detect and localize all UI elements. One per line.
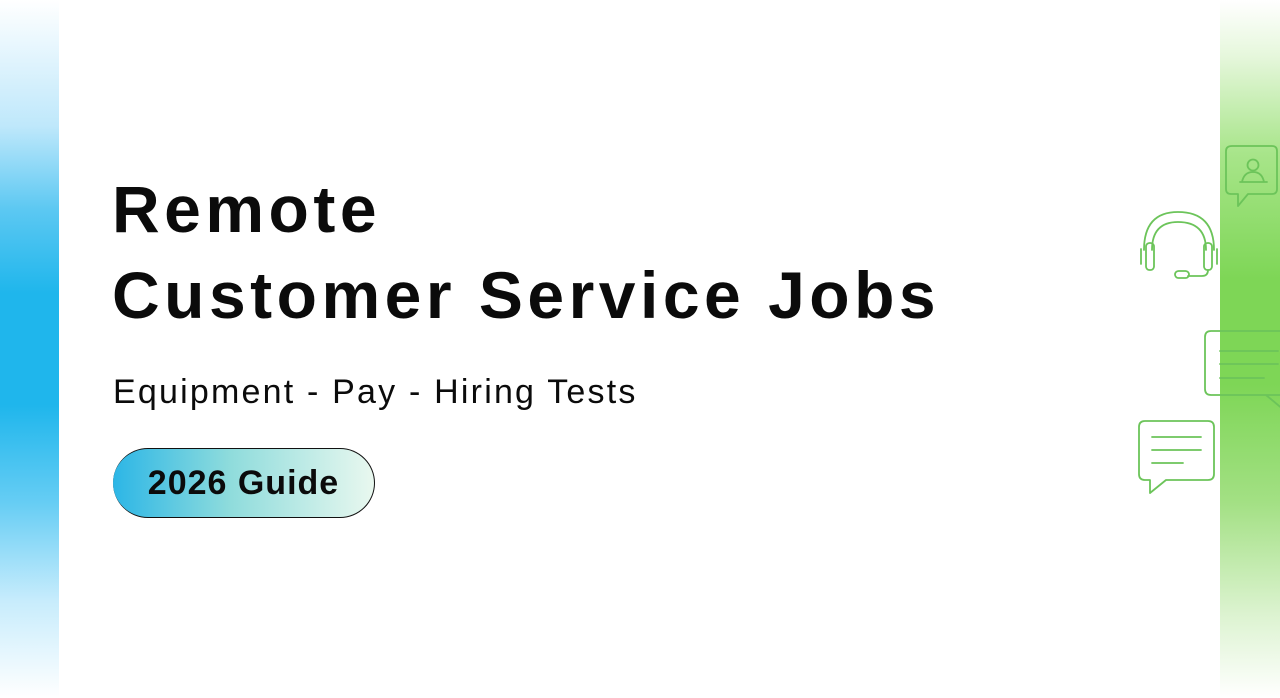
badge: 2026 Guide [148,464,339,502]
badge [113,448,375,518]
left gradient bar [0,0,59,698]
icon: headset [1141,212,1217,278]
title line 1: Remote [112,172,381,246]
right gradient bar [1220,0,1280,698]
icon: person chat bubble [1226,146,1277,206]
title line 2: Customer Service Jobs [112,258,940,332]
icon: large chat bubble [1205,331,1280,410]
subtitle: Equipment - Pay - Hiring Tests [113,373,638,411]
icon: small chat bubble [1139,421,1214,493]
